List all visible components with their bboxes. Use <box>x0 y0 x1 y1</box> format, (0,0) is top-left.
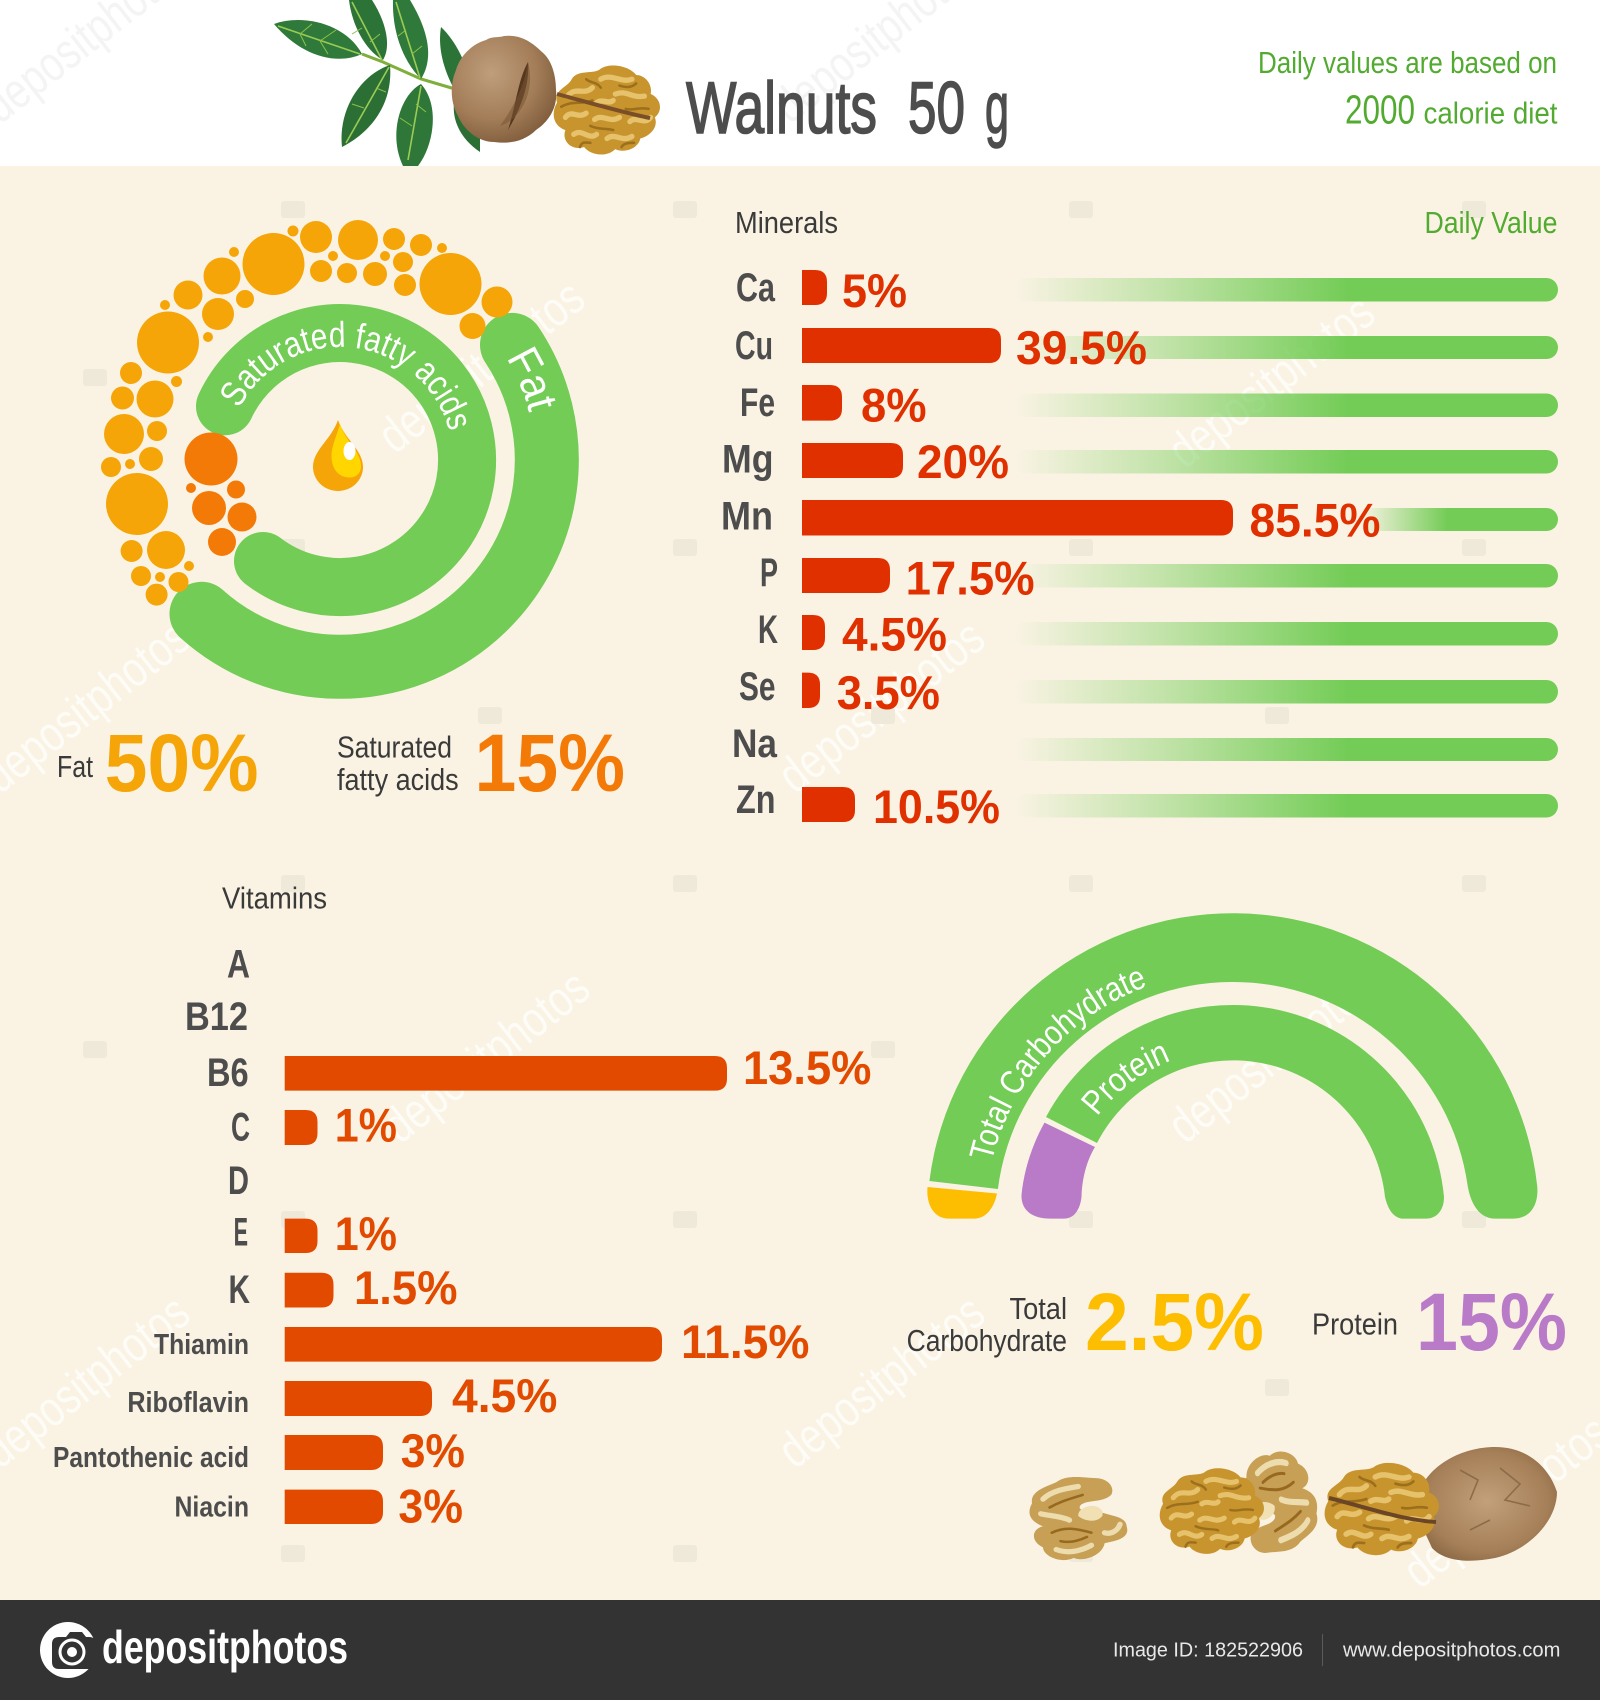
mineral: Mg: Mg <box>722 438 774 482</box>
kernel full <box>1325 1463 1439 1555</box>
mineral: K <box>758 607 947 660</box>
arc tip: protein value <box>1021 1123 1095 1219</box>
stat: total carbohydrate: Total <box>1010 1291 1067 1326</box>
vitamin: B6: 13.5% <box>743 1041 871 1094</box>
mineral: K: K <box>758 608 778 652</box>
stat: fat: Fat <box>57 749 93 784</box>
mineral: Zn: 10.5% <box>873 780 1000 833</box>
whole walnut <box>1417 1447 1557 1561</box>
mineral: Zn <box>736 778 1000 833</box>
mineral: P: 17.5% <box>906 552 1035 605</box>
watermark: depositphotos <box>767 609 995 804</box>
vitamin: C: 1% <box>335 1099 397 1152</box>
vitamin: thiamin: Thiamin <box>154 1329 249 1361</box>
mineral: Mn <box>721 494 1380 547</box>
illustration: walnut branch <box>274 0 660 166</box>
illustration: walnuts row <box>1029 1447 1557 1561</box>
logo: depositphotos: depositphotos <box>102 1621 348 1673</box>
vitamin: B6 <box>207 1041 871 1095</box>
stat: saturated fatty acids: Saturated <box>337 730 452 765</box>
arc: protein <box>1046 1005 1444 1219</box>
website: www.depositphotos.com <box>1342 1640 1560 1662</box>
bubbles: saturated fatty acids <box>184 432 256 556</box>
illustration: kernel <box>554 66 660 155</box>
vitamin: K: 1.5% <box>354 1261 458 1314</box>
vitamin: E: E <box>234 1211 248 1255</box>
watermark: depositphotos <box>367 269 595 464</box>
stat: fat: 50% <box>105 718 259 809</box>
mineral: Fe: 8% <box>861 379 926 432</box>
title: 50 <box>908 68 965 149</box>
stat: protein: Protein <box>1312 1307 1398 1342</box>
mineral: Fe: Fe <box>740 381 775 425</box>
stat: total carbohydrate: Carbohydrate <box>907 1323 1067 1358</box>
diet note: 2000 <box>1345 86 1415 132</box>
mineral: Mn: Mn <box>721 494 773 538</box>
mineral: P: P <box>760 551 778 595</box>
vitamin: B12: B12 <box>185 995 248 1039</box>
mineral chart <box>721 264 1380 833</box>
bubbles: fat <box>101 220 512 606</box>
mineral: Ca: 5% <box>842 264 907 317</box>
stat: saturated fatty acids: 15% <box>474 718 625 809</box>
mineral: Cu: Cu <box>735 324 773 368</box>
outer ring: fat <box>202 345 547 667</box>
heading: daily value: Daily Value <box>1424 205 1558 240</box>
illustration: whole walnut <box>452 36 556 143</box>
watermark: depositphotos <box>372 959 600 1154</box>
title: Walnuts <box>686 68 877 149</box>
vitamin: D: D <box>228 1159 249 1203</box>
footer bar <box>0 1600 1600 1700</box>
stat: total carbohydrate: 2.5% <box>1085 1277 1264 1368</box>
panel: fat ring chart <box>101 220 579 699</box>
mineral: Se: Se <box>739 665 776 709</box>
watermark: depositphotos <box>1157 284 1385 479</box>
vitamin: C: C <box>231 1106 250 1150</box>
mineral: Cu: 39.5% <box>1016 321 1147 374</box>
stat: saturated fatty acids <box>337 718 625 809</box>
panel: carbohydrate and protein arcs <box>927 913 1538 1219</box>
icon: oil drop <box>313 420 363 491</box>
mineral: Se: 3.5% <box>837 666 940 719</box>
mineral: Mg: 20% <box>917 435 1009 488</box>
stat: total carbohydrate <box>907 1277 1264 1368</box>
mineral: Ca: Ca <box>736 266 776 310</box>
vitamin: niacin: 3% <box>398 1480 463 1533</box>
arc label: protein: Protein <box>1080 1046 1170 1115</box>
vitamin: C <box>231 1099 397 1152</box>
arc tip: carbohydrate value <box>927 1187 997 1219</box>
vitamin: E <box>234 1207 397 1260</box>
vitamin: A: A <box>227 942 250 986</box>
vitamin: niacin: Niacin <box>174 1492 249 1524</box>
vitamin: thiamin: 11.5% <box>681 1315 809 1368</box>
kernel half <box>1029 1477 1127 1560</box>
stat: protein: 15% <box>1416 1277 1567 1368</box>
heading: minerals: Minerals <box>735 205 838 240</box>
mineral: Cu <box>735 321 1147 374</box>
mineral: Ca <box>736 264 907 317</box>
diet note: calorie diet <box>1424 96 1558 130</box>
ring label: fat: Fat <box>508 346 556 412</box>
stat: protein <box>1312 1277 1567 1368</box>
mineral: Na: Na <box>732 722 778 766</box>
mineral: Fe <box>740 379 926 432</box>
mineral: Mg <box>722 435 1009 488</box>
mineral: Zn: Zn <box>736 778 776 822</box>
mineral: Mn: 85.5% <box>1250 494 1380 547</box>
vitamin: riboflavin: 4.5% <box>452 1369 557 1422</box>
vitamin: E: 1% <box>335 1207 397 1260</box>
arc: total carbohydrate <box>929 913 1537 1219</box>
daily value bars <box>1014 278 1558 818</box>
vitamin: pantothenic acid: 3% <box>401 1424 465 1477</box>
vitamin: pantothenic acid: Pantothenic acid <box>53 1442 249 1474</box>
vitamin: B6: B6 <box>207 1051 249 1095</box>
diet note <box>1258 45 1558 132</box>
vitamin: pantothenic acid <box>53 1424 465 1477</box>
ring label: saturated fatty acids: Saturated fatty acids <box>221 320 468 430</box>
vitamin: thiamin <box>154 1315 809 1368</box>
watermark: depositphotos <box>1157 959 1385 1154</box>
logo: depositphotos <box>40 1621 348 1678</box>
mineral: Se <box>739 665 940 719</box>
mineral: K: 4.5% <box>842 607 947 660</box>
vitamin chart <box>53 942 871 1533</box>
mineral: P <box>760 551 1035 605</box>
vitamin: riboflavin: Riboflavin <box>127 1387 249 1419</box>
title: g <box>985 68 1009 149</box>
vitamin: riboflavin <box>127 1369 557 1422</box>
kernel pair <box>1160 1447 1324 1559</box>
heading: vitamins: Vitamins <box>222 880 327 916</box>
vitamin: K <box>228 1261 458 1314</box>
arc label: total carbohydrate: Total Carbohydrate <box>969 972 1145 1156</box>
image id: Image ID: 182522906 <box>1113 1640 1303 1662</box>
stat: saturated fatty acids: fatty acids <box>337 762 459 797</box>
vitamin: niacin <box>174 1480 463 1533</box>
watermark: depositphotos <box>767 1284 995 1479</box>
vitamin: K: K <box>228 1268 250 1312</box>
inner ring: saturated fatty acids <box>225 333 467 587</box>
